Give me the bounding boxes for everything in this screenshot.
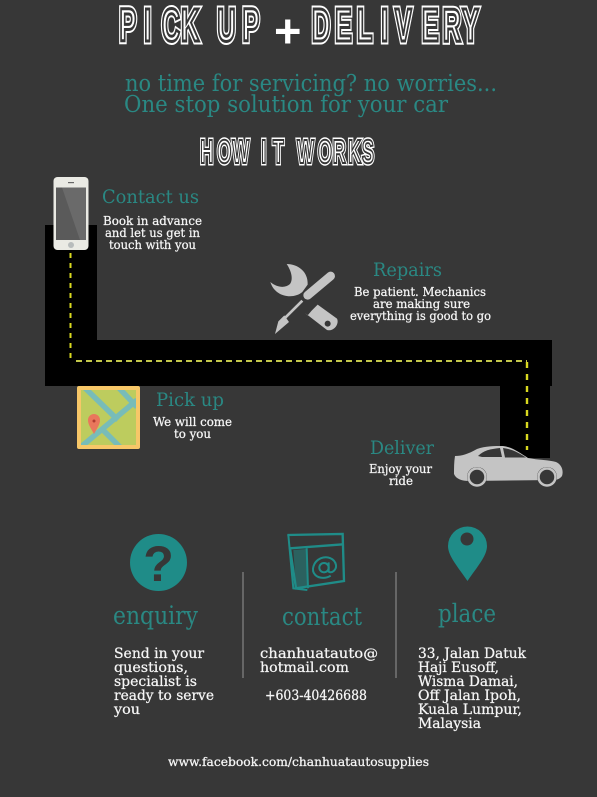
step: repairs: Be patient. Mechanics: [354, 284, 486, 299]
column: contact: +603-40426688: [265, 688, 367, 704]
icon: question mark: ?: [143, 536, 174, 592]
step: repairs: Repairs: [373, 259, 442, 281]
column: enquiry: questions,: [114, 660, 188, 676]
footer: facebook url: www.facebook.com/chanhuatautosupplies: [168, 754, 429, 769]
column: place: Wisma Damai,: [418, 674, 518, 690]
step: pick up: to you: [174, 426, 211, 441]
step: pick up: [153, 389, 232, 441]
column: contact: [260, 602, 378, 704]
heading: how it works: HOW IT WORKS: [200, 133, 374, 170]
tagline: no time for servicing? no worries...: [125, 71, 497, 97]
title: [119, 0, 479, 57]
step: contact us: touch with you: [109, 237, 196, 252]
column: enquiry: Send in your: [114, 646, 204, 662]
column: place: 33, Jalan Datuk: [418, 646, 526, 662]
column: enquiry: you: [113, 702, 140, 718]
column: contact: hotmail.com: [260, 660, 349, 676]
heading: how it works: HOW IT WORKS: [200, 133, 374, 170]
icon: map: [77, 386, 140, 449]
title: PICK UP: [119, 0, 259, 51]
title: DELIVERY: [312, 0, 479, 51]
step: deliver: Enjoy your: [369, 461, 432, 476]
column: contact: chanhuatauto@: [260, 646, 378, 662]
tagline: [124, 71, 497, 118]
step: pick up: We will come: [153, 414, 232, 429]
step: deliver: [369, 437, 435, 488]
column: contact: contact: [282, 602, 362, 631]
step: repairs: [350, 259, 491, 323]
icon: phone: [54, 177, 88, 250]
column: place: place: [438, 599, 496, 628]
step: pick up: Pick up: [156, 389, 224, 411]
title: +: [274, 4, 301, 57]
tagline: One stop solution for your car: [124, 92, 448, 118]
column: enquiry: enquiry: [113, 601, 199, 630]
title: DELIVERY: [312, 0, 479, 51]
icon: wrench and screwdriver: [270, 264, 338, 334]
icon: question mark: [130, 534, 187, 592]
step: contact us: and let us get in: [105, 225, 200, 240]
icon: car: [454, 446, 563, 487]
step: contact us: Contact us: [102, 186, 199, 208]
icon: address book: [287, 534, 344, 590]
column: place: Malaysia: [418, 716, 481, 732]
step: contact us: [102, 186, 202, 252]
step: deliver: Deliver: [370, 437, 435, 459]
column: place: [418, 599, 526, 732]
step: repairs: everything is good to go: [350, 308, 491, 323]
step: repairs: are making sure: [373, 296, 470, 311]
column: place: Off Jalan Ipoh,: [418, 688, 521, 704]
column: place: Kuala Lumpur,: [418, 702, 522, 718]
road path: [45, 225, 552, 458]
column: place: Haji Eusoff,: [418, 660, 499, 676]
column: enquiry: ready to serve: [114, 688, 214, 704]
icon: location pin: [448, 526, 487, 581]
column: enquiry: specialist is: [114, 674, 197, 690]
column: enquiry: [113, 601, 214, 718]
step: deliver: ride: [389, 473, 413, 488]
step: contact us: Book in advance: [103, 213, 202, 228]
title: PICK UP: [119, 0, 259, 51]
